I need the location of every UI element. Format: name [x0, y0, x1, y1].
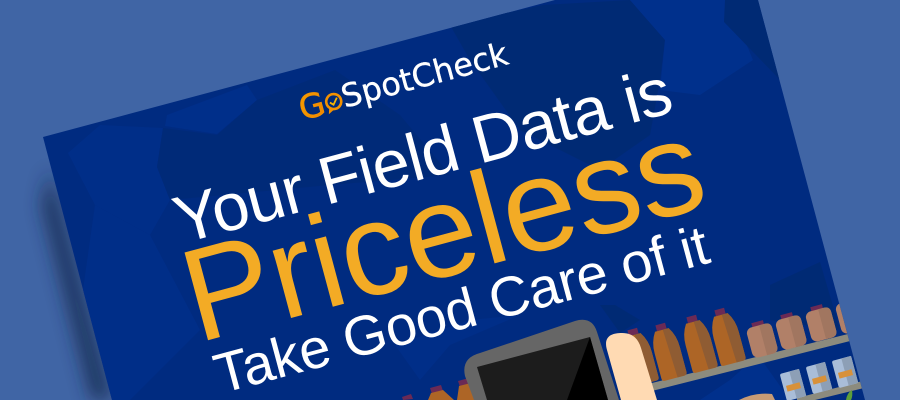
bottle	[628, 328, 659, 382]
title	[170, 74, 712, 390]
tablet screen	[477, 337, 608, 400]
bottle	[684, 314, 718, 373]
bottle, cropped	[457, 378, 474, 400]
logo	[300, 43, 510, 118]
logo word Go	[300, 92, 343, 118]
bottle, cropped	[428, 385, 454, 400]
headline line 2: Priceless	[167, 90, 719, 370]
can	[832, 356, 858, 388]
finger	[606, 333, 657, 400]
logo word SpotCheck: SpotCheck	[337, 35, 512, 116]
jar	[836, 304, 848, 334]
can	[806, 362, 832, 394]
jar	[776, 312, 806, 350]
headline line 1: Your Field Data is	[166, 53, 680, 258]
leaf	[846, 390, 852, 400]
pie	[739, 394, 775, 400]
tablet device	[464, 320, 619, 400]
jars on shelf	[746, 304, 848, 358]
shelf: upper	[652, 334, 850, 390]
bottle	[653, 322, 687, 381]
logo word Go: G	[294, 84, 329, 128]
can	[780, 369, 806, 400]
cans on shelf	[780, 356, 858, 400]
bottle	[712, 308, 746, 366]
page shadow	[42, 170, 112, 400]
bottles on shelf	[402, 306, 746, 400]
headline line 3: Take Good Care of it	[207, 213, 716, 400]
jar	[806, 304, 836, 342]
shelf: lower	[797, 382, 862, 400]
screen glare	[567, 337, 608, 400]
jar	[746, 320, 778, 358]
bottle, cropped	[402, 394, 413, 400]
